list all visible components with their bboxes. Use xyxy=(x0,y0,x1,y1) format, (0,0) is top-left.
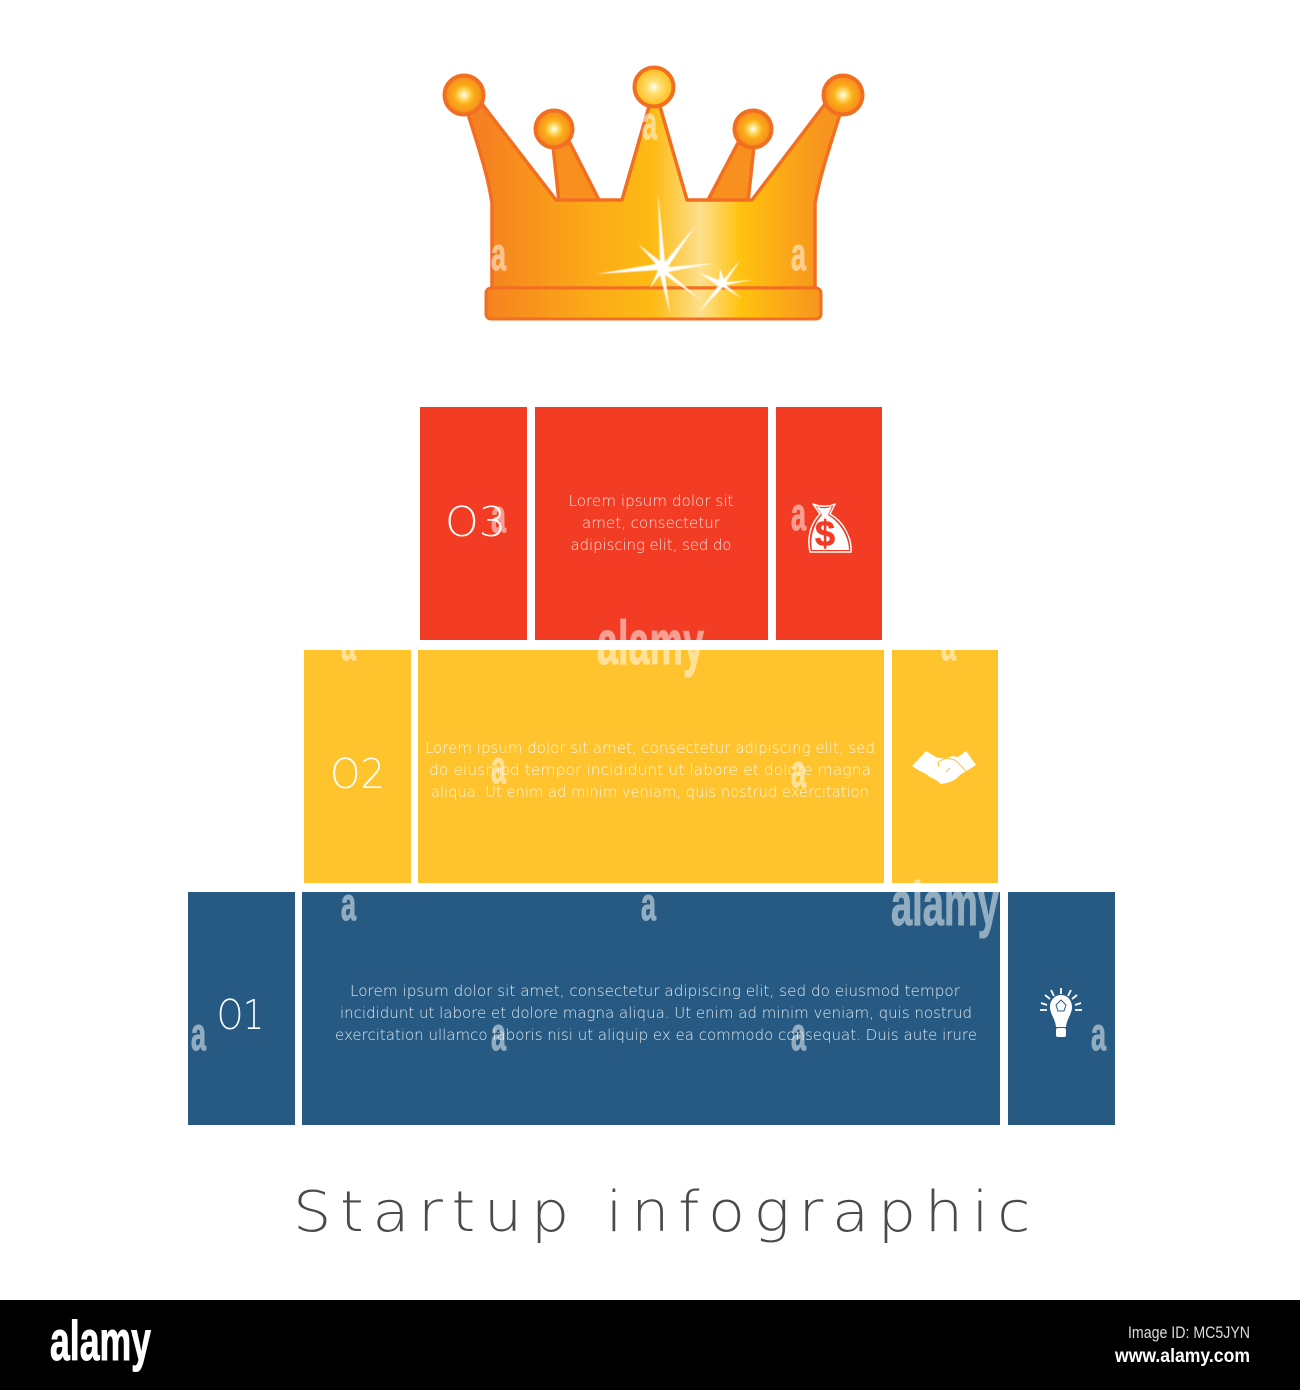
body text 01: incididunt ut labore et dolore magna aliqua. Ut enim ad minim veniam, quis nostrud xyxy=(340,1004,972,1022)
panel: level 03 xyxy=(420,407,882,640)
crown jewels xyxy=(444,68,862,148)
watermarks: a xyxy=(491,490,506,542)
watermarks: a xyxy=(1091,1008,1106,1060)
text block 01 xyxy=(302,892,1000,1125)
title: Startup infographic xyxy=(293,1180,1039,1245)
watermarks: a xyxy=(791,745,806,797)
number block 02 xyxy=(304,650,411,883)
body text 03: amet, consectetur xyxy=(582,514,721,532)
body text 01 xyxy=(335,982,977,1044)
icon: handshake xyxy=(912,751,976,784)
footer logo: alamy xyxy=(50,1309,151,1372)
watermarks: alamy xyxy=(597,609,704,678)
crown body xyxy=(468,103,840,288)
body text 03: adipiscing elit, sed do xyxy=(570,536,732,554)
icon: money bag: $ xyxy=(815,513,835,554)
watermarks xyxy=(191,97,1106,1060)
body text 03 xyxy=(568,492,734,554)
text block 03 xyxy=(535,407,768,640)
icon: golden crown xyxy=(444,68,862,319)
body text 02: do eiusmod tempor incididunt ut labore et dolore magna xyxy=(429,761,871,779)
watermarks: a xyxy=(341,618,356,670)
number 03: O3 xyxy=(445,498,506,546)
body text 02: aliqua. Ut enim ad minim veniam, quis nostrud exercitation xyxy=(431,783,869,801)
body text 02: Lorem ipsum dolor sit amet, consectetur adipiscing elit, sed xyxy=(425,739,875,757)
body text 02 xyxy=(425,739,875,801)
watermarks: a xyxy=(791,1008,806,1060)
watermarks: a xyxy=(791,228,806,280)
body text 03: Lorem ipsum dolor sit xyxy=(568,492,734,510)
icon: money bag xyxy=(809,504,851,554)
crown sparkles xyxy=(596,193,752,313)
watermarks: a xyxy=(791,488,806,540)
crown band xyxy=(486,288,821,319)
watermarks: a xyxy=(491,1008,506,1060)
watermarks: a xyxy=(341,878,356,930)
number 01: O1 xyxy=(217,991,264,1039)
footer url: www.alamy.com xyxy=(1114,1346,1250,1367)
number block 01 xyxy=(188,892,295,1125)
footer bar xyxy=(0,1300,1300,1390)
body text 01: Lorem ipsum dolor sit amet, consectetur adipiscing elit, sed do eiusmod tempor xyxy=(350,982,961,1000)
text block 02 xyxy=(418,650,884,883)
watermarks: a xyxy=(941,618,956,670)
icon block 01 xyxy=(1008,892,1115,1125)
icon: light bulb xyxy=(1040,988,1082,1037)
watermarks: a xyxy=(641,878,656,930)
watermarks: a xyxy=(642,97,657,149)
watermarks: a xyxy=(191,1008,206,1060)
number 02: O2 xyxy=(330,750,385,798)
number block 03 xyxy=(420,407,527,640)
body text 01: exercitation ullamco laboris nisi ut aliquip ex ea commodo consequat. Duis aute irure xyxy=(335,1026,977,1044)
watermarks: a xyxy=(491,228,506,280)
image id: Image ID: MC5JYN xyxy=(1128,1323,1250,1342)
watermarks: alamy xyxy=(891,870,999,939)
watermarks: a xyxy=(491,741,506,793)
icon block 02 xyxy=(892,650,998,883)
panel: level 01 xyxy=(188,892,1115,1125)
crown spikes xyxy=(553,143,754,202)
panel: level 02 xyxy=(304,650,998,883)
icon block 03 xyxy=(776,407,882,640)
